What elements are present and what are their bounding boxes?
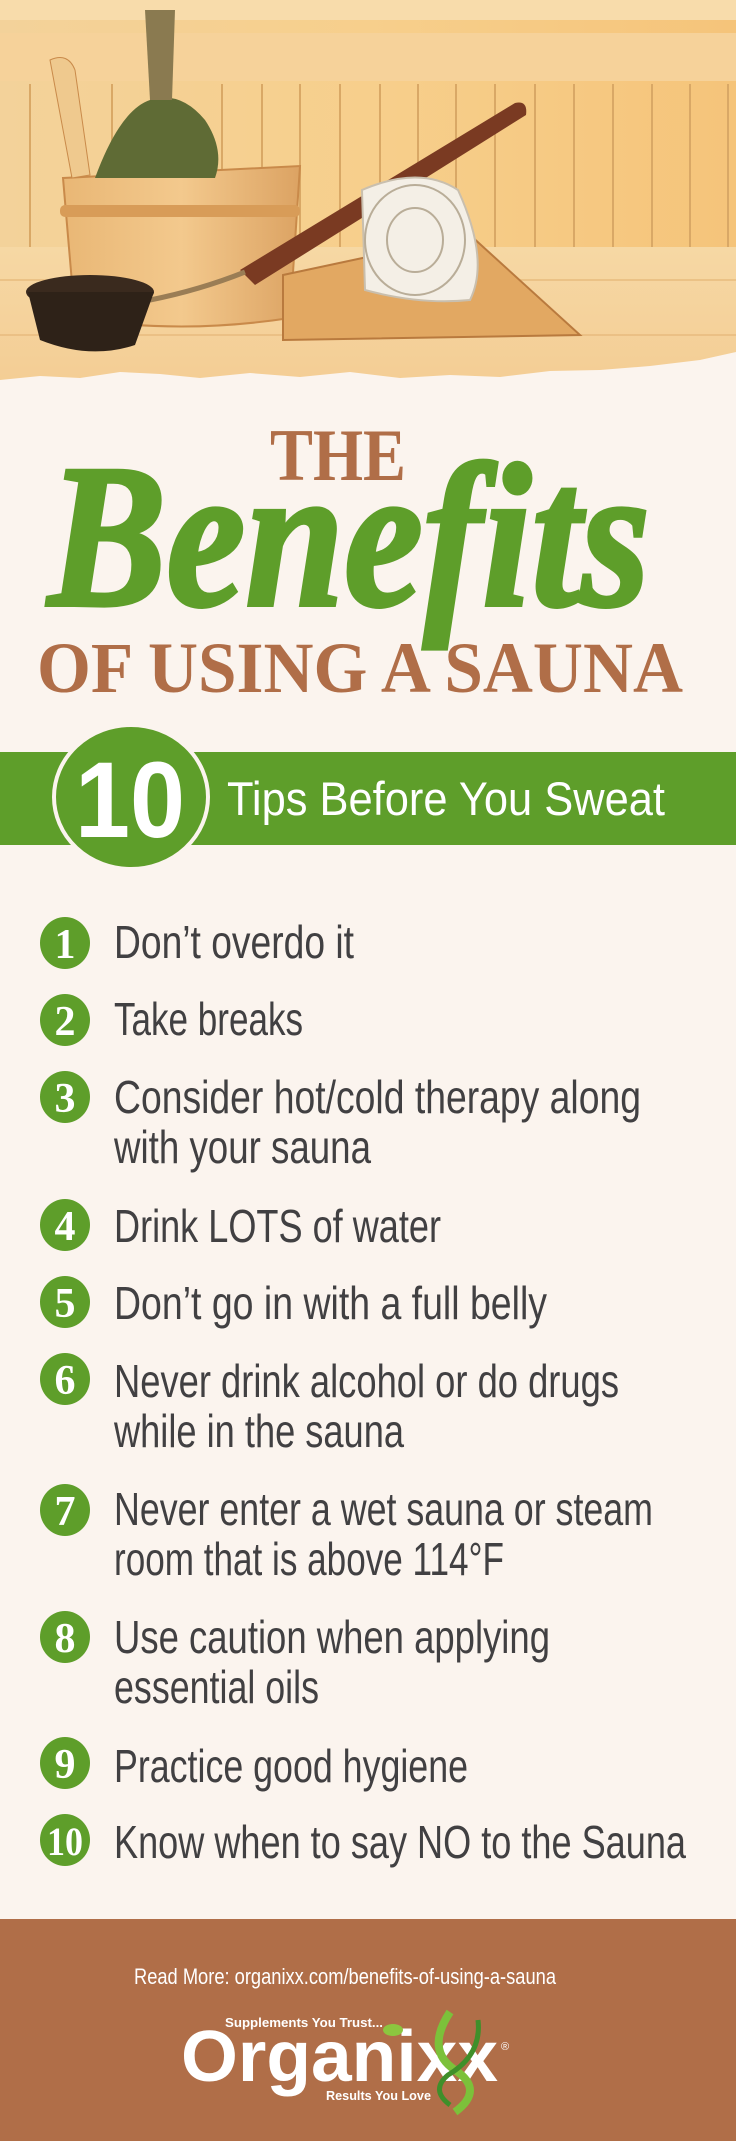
badge: 10: 10 xyxy=(75,739,185,860)
logo: Organixx: Supplements You Trust... xyxy=(225,2015,383,2030)
tip 10: 10 xyxy=(47,1819,83,1864)
tip 4: Drink LOTS of water xyxy=(114,1200,441,1252)
footer xyxy=(0,1919,736,2141)
logo: Organixx: ® xyxy=(501,2041,509,2053)
tip 9: 9 xyxy=(54,1742,76,1788)
logo: Organixx: Results You Love xyxy=(326,2088,431,2103)
tip 9 xyxy=(40,1737,468,1792)
tip 7: 7 xyxy=(54,1489,76,1535)
torn edge xyxy=(0,352,736,390)
tip 1 xyxy=(40,916,354,969)
tip 7 xyxy=(40,1483,653,1585)
badge: 10 xyxy=(54,725,208,869)
branches xyxy=(95,98,218,178)
tip 8: 8 xyxy=(54,1616,76,1662)
headrest xyxy=(283,235,580,340)
tip 5: Don’t go in with a full belly xyxy=(114,1277,547,1329)
tip 7: room that is above 114°F xyxy=(114,1533,504,1585)
tip 1: 1 xyxy=(54,922,76,968)
tip 4 xyxy=(40,1199,441,1252)
handle xyxy=(240,102,526,285)
tip 6: 6 xyxy=(54,1358,76,1404)
towel xyxy=(362,178,478,301)
title: Benefits: Benefits xyxy=(46,423,650,650)
tip 8 xyxy=(40,1611,550,1713)
logo: Organixx: Organixx xyxy=(181,2017,498,2097)
banner: 10 Tips Before You Sweat xyxy=(0,725,736,869)
tip 3 xyxy=(40,1071,641,1173)
tip 3: with your sauna xyxy=(113,1121,371,1173)
ladle bowl xyxy=(26,275,154,309)
banner text: Tips Before You Sweat xyxy=(227,772,665,825)
bucket xyxy=(63,166,300,326)
tip 2: Take breaks xyxy=(114,993,303,1045)
tip 2: 2 xyxy=(54,999,76,1045)
tip 3: 3 xyxy=(54,1076,76,1122)
tip 2 xyxy=(40,993,303,1046)
title: OF USING A SAUNA: OF USING A SAUNA xyxy=(37,628,683,708)
title: THE: THE xyxy=(270,415,406,497)
tip 8: essential oils xyxy=(114,1661,319,1713)
tip 8: Use caution when applying xyxy=(114,1611,550,1663)
tip 6: while in the sauna xyxy=(113,1405,404,1457)
tips list xyxy=(40,916,686,1868)
tip 9: Practice good hygiene xyxy=(114,1740,468,1792)
tip 6 xyxy=(40,1353,619,1457)
tip 1: Don’t overdo it xyxy=(114,916,354,968)
tip 6: Never drink alcohol or do drugs xyxy=(114,1355,619,1407)
scoop xyxy=(50,58,90,178)
read more link text: Read More: organixx.com/benefits-of-using-a-sauna xyxy=(134,1964,557,1989)
tip 5: 5 xyxy=(54,1281,76,1327)
tip 4: 4 xyxy=(54,1204,76,1250)
header photo: sauna xyxy=(0,0,736,390)
